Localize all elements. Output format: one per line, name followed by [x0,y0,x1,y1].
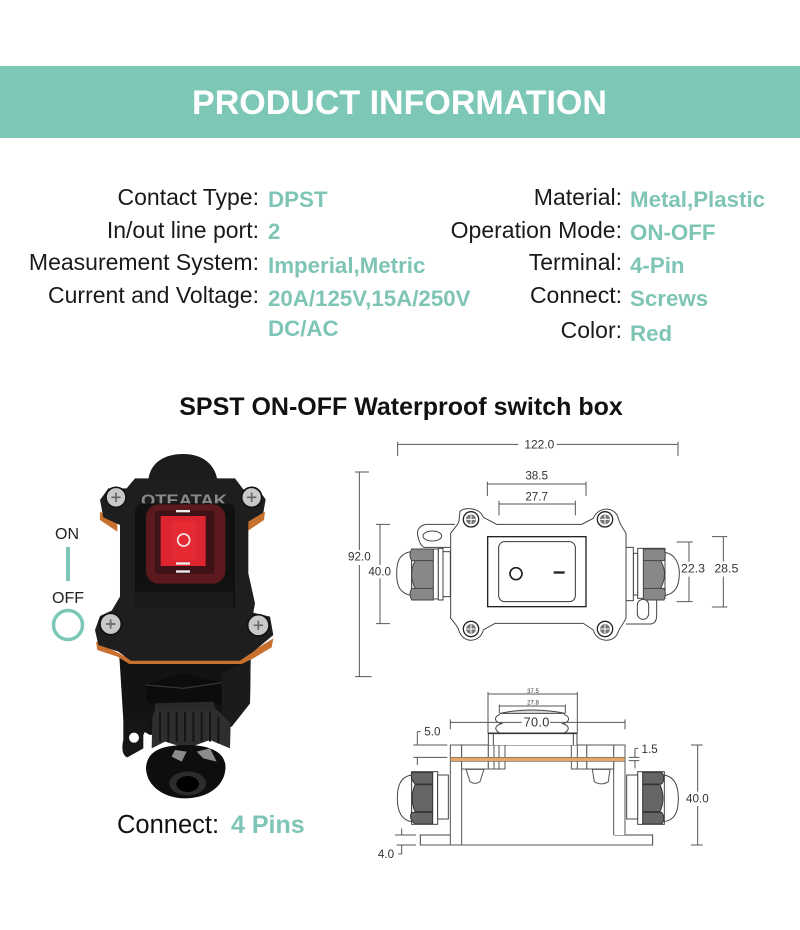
bosses and inner posts [462,745,614,784]
enclosure outline [451,509,626,640]
orange seal [96,512,273,664]
specifications: right column: 4-Pin [630,253,685,278]
specifications: left column: 20A/125V,15A/250V [268,286,471,311]
dimension drawing: side view [378,689,709,861]
specifications: right column: Red [630,321,672,346]
switch state legend: ON [55,526,79,543]
left cable gland [397,772,448,824]
dimension labels: 1.5 [642,743,658,756]
switch state legend [52,526,84,640]
specifications: left column: Contact Type: [118,184,259,210]
lower housing [119,657,251,735]
dimension labels [348,438,738,578]
mounting tabs [417,524,455,547]
specifications: left column [29,184,471,341]
specifications: left column: 2 [268,219,280,244]
rocker profile [488,710,577,745]
corner screws [100,487,269,636]
dimension labels: 37.5 [527,689,539,695]
dimension labels: 40.0 [686,793,709,806]
left cable gland [397,548,450,600]
dimension labels: 4.0 [378,848,395,861]
specifications: left column: Imperial,Metric [268,253,425,278]
specifications: right column [451,184,765,346]
specifications: left column: Measurement System: [29,249,259,275]
header banner: PRODUCT INFORMATION [192,84,607,122]
right cable gland [627,772,678,824]
dimension labels [378,689,709,861]
cable opening [169,771,206,795]
top cable gland [148,454,217,480]
rocker: red lens [146,504,225,584]
dimension labels: 92.0 [348,551,371,564]
header banner [0,66,800,138]
product photo: waterproof switch box [95,454,273,798]
dimension lines [355,442,727,677]
dimension labels: 122.0 [524,438,555,452]
dimension labels: 5.0 [424,725,441,738]
brand text: QTEATAK [141,493,227,510]
caption: connect 4 pins [117,811,305,839]
dimension labels: 28.5 [714,562,738,576]
specifications: right column: Metal,Plastic [630,187,765,212]
switch base [135,503,235,608]
specifications: right column: ON-OFF [630,220,715,245]
dimension lines [395,692,703,854]
lower gland nut [146,673,222,705]
right cable gland [626,547,679,601]
dimension labels: 22.3 [681,562,705,576]
screws [463,512,613,637]
caption: connect 4 pins: 4 Pins [231,811,305,839]
specifications: left column: DPST [268,187,328,212]
specifications: right column: Color: [561,317,622,343]
enclosure body [450,745,625,845]
specifications: left column: DC/AC [268,316,339,341]
specifications: left column: In/out line port: [107,217,259,243]
specifications: right column: Operation Mode: [451,217,622,243]
specifications: left column: Current and Voltage: [48,282,259,308]
dimension labels: 38.5 [525,470,548,483]
ribbed gland collar [152,709,231,748]
dimension labels: 27.8 [527,700,539,706]
mounting tab [122,718,152,757]
rubber dome [146,745,226,798]
dimension drawing: top view [348,438,738,677]
section heading: SPST ON-OFF Waterproof switch box [179,393,623,421]
rocker marks [176,510,190,573]
specifications: right column: Terminal: [529,249,622,275]
specifications: right column: Material: [534,184,622,210]
switch state legend: OFF [52,590,84,607]
orange gasket [450,757,625,761]
dimension labels: 27.7 [525,491,548,504]
base flange [420,835,653,845]
specifications: right column: Screws [630,286,708,311]
dimension labels: 70.0 [524,716,550,730]
main lid [95,478,273,661]
dimension labels: 40.0 [368,565,392,578]
specifications: right column: Connect: [530,282,622,308]
rocker switch outline [488,537,586,607]
caption: connect 4 pins: Connect: [117,811,219,839]
